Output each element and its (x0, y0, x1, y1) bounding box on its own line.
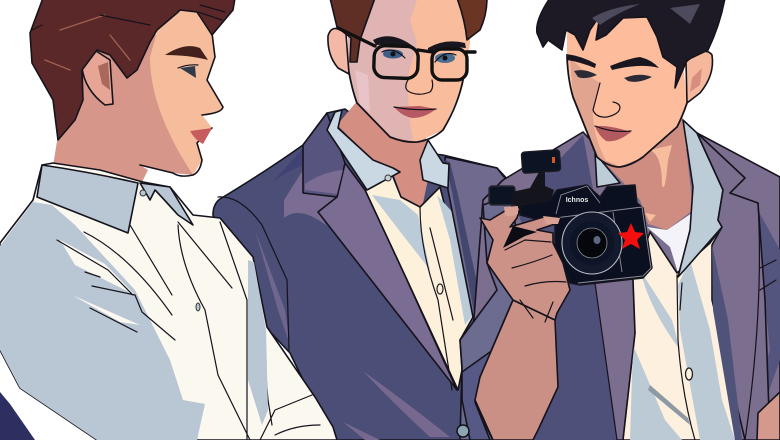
right man sleeve (460, 195, 520, 440)
left man collar (37, 165, 138, 233)
middle man jacket button (457, 425, 469, 437)
right lapel dark band (445, 160, 482, 313)
placket button (196, 303, 200, 311)
right man ear (686, 51, 712, 103)
neck highlight (645, 145, 672, 222)
camera brand label: Ichnos (566, 197, 588, 204)
left man ear (82, 51, 113, 105)
middle man ear (328, 28, 349, 74)
middle man face (348, 0, 470, 142)
middle man collar (327, 110, 449, 190)
middle man neck (337, 100, 432, 208)
right man hand holding camera (480, 206, 570, 322)
sleeve highlights and folds (57, 222, 320, 440)
figure: middle man with glasses (213, 0, 510, 440)
figure: right man with camera (460, 0, 780, 440)
left man sleeve shading (0, 202, 205, 440)
sleeve dark cuff band (462, 347, 497, 440)
right man bare forearm at edge (757, 392, 780, 440)
right man undershirt (647, 213, 692, 273)
red star (618, 223, 644, 249)
right man face (566, 14, 687, 167)
left man hair (30, 0, 235, 140)
right man forearm (475, 300, 558, 440)
middle man suit jacket (213, 109, 510, 440)
camera mount (512, 172, 554, 208)
right man neck (595, 118, 693, 230)
middle man hair (330, 0, 375, 62)
camera lens (562, 212, 622, 274)
right man lapels (595, 133, 776, 440)
middle man left lapel (318, 163, 457, 390)
camera front outline (555, 186, 651, 283)
right man jacket (470, 132, 780, 440)
red indicator (552, 157, 555, 163)
left man neck and face (53, 8, 223, 182)
shirt shading and button (372, 195, 473, 390)
right man collar (678, 120, 723, 277)
camera body (520, 185, 652, 285)
camera top viewfinder (521, 150, 561, 173)
middle man upper lapel (303, 113, 345, 197)
dark seat corner (0, 392, 35, 440)
right man shirt (623, 227, 740, 440)
hair highlights (592, 4, 700, 25)
middle man shirt (365, 172, 473, 390)
middle man glasses (338, 28, 475, 80)
right man hair (537, 0, 725, 88)
figure: left man in profile (0, 0, 337, 440)
collar button (140, 190, 146, 196)
hair strands (32, 5, 225, 70)
camera side monitor (489, 186, 515, 205)
camera (489, 150, 652, 285)
left man shirt (0, 163, 337, 440)
middle man right lapel (445, 157, 508, 317)
